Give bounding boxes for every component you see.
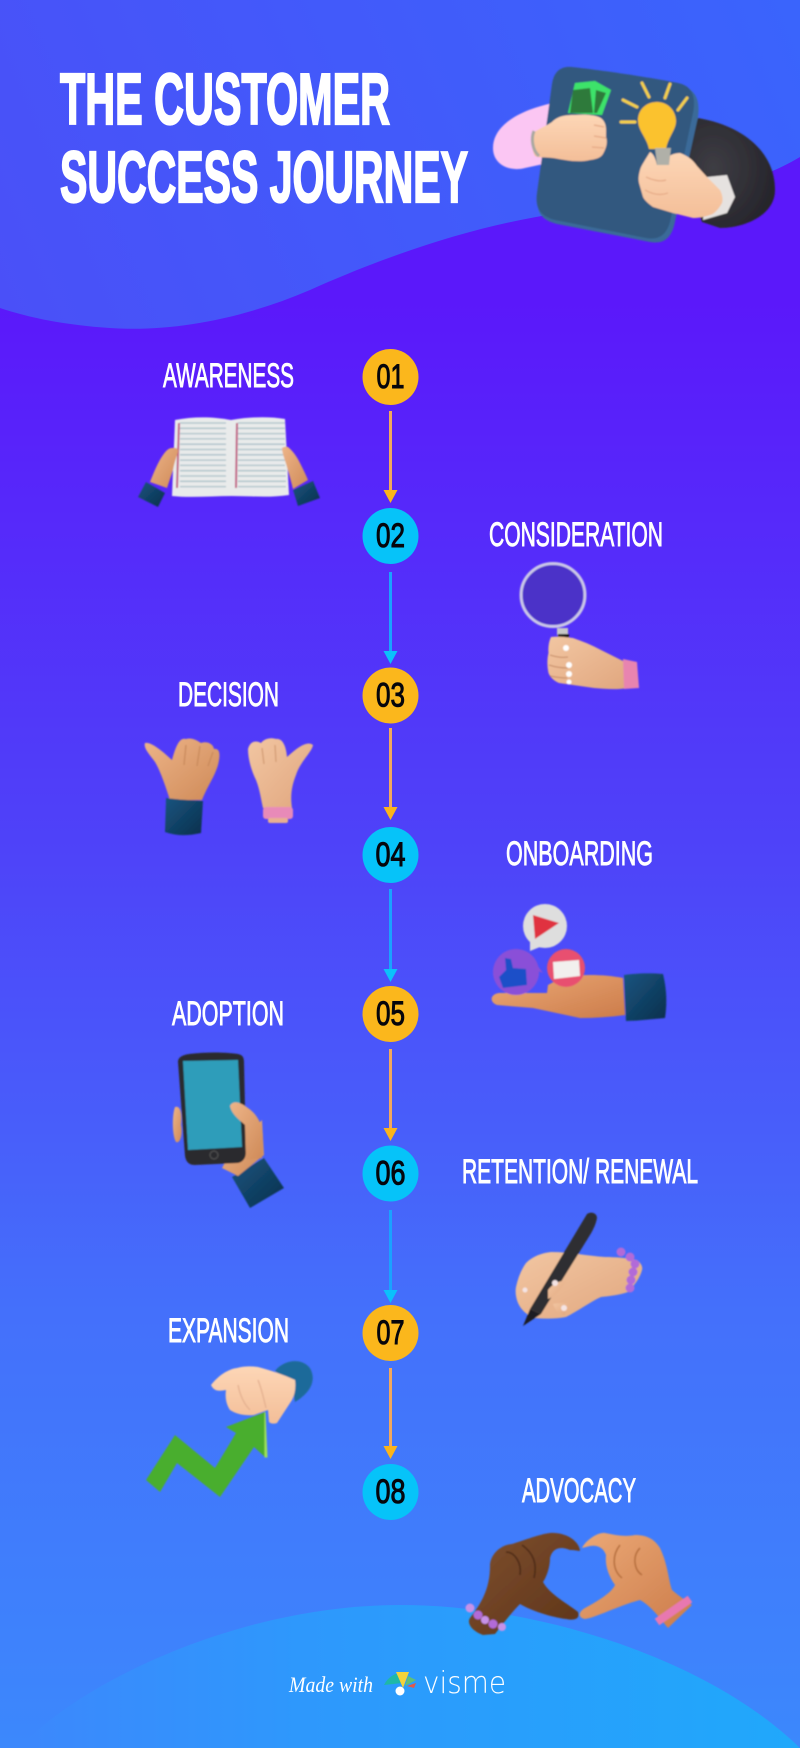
icon: two thumbs up hands (145, 738, 313, 835)
label: onboarding: ONBOARDING (506, 835, 653, 873)
icon: open book with hands (138, 417, 320, 507)
label: decision: DECISION (178, 676, 279, 714)
step 02 number: 02 (376, 517, 405, 555)
footer: made with visme (288, 1666, 506, 1701)
step 03 number: 03 (376, 676, 405, 714)
label: advocacy: ADVOCACY (522, 1472, 636, 1510)
step 02 number (362, 508, 418, 564)
footer: made with visme: Made with (288, 1672, 373, 1697)
step 01 number: 01 (376, 358, 404, 396)
step 04 number (362, 827, 418, 883)
timeline arrows (384, 411, 398, 1459)
bottom blob (20, 1605, 800, 1748)
icon: visme logo (384, 1672, 416, 1696)
step 08 number: 08 (376, 1473, 406, 1511)
title (60, 60, 468, 218)
step 01 number (362, 349, 418, 405)
label: consideration: CONSIDERATION (489, 516, 663, 554)
icon: tablet with hands, money and light bulb (493, 67, 775, 242)
step 08 number (362, 1464, 418, 1520)
step 06 number (362, 1146, 418, 1202)
top wave (0, 0, 800, 329)
icon: hand holding social bubbles (492, 904, 666, 1021)
right cuff (703, 175, 735, 220)
icon: hand holding smartphone (173, 1052, 284, 1208)
title: SUCCESS JOURNEY (60, 138, 468, 218)
step 05 number: 05 (376, 995, 405, 1033)
footer: made with visme: visme (423, 1666, 506, 1701)
icon: writing hand with pen (516, 1213, 642, 1326)
right hand (639, 152, 723, 218)
label: adoption: ADOPTION (172, 995, 284, 1033)
title: THE CUSTOMER (60, 60, 390, 140)
icon: hand lifting green growth arrow (146, 1361, 313, 1497)
label: awareness: AWARENESS (163, 357, 294, 395)
left fist (532, 115, 607, 161)
icon: two hands forming a heart (466, 1533, 692, 1635)
step 04 number: 04 (376, 836, 406, 874)
money (568, 81, 611, 115)
bulb (638, 102, 676, 149)
step 03 number (362, 668, 418, 724)
step 06 number: 06 (376, 1154, 406, 1192)
step 07 number: 07 (376, 1314, 404, 1352)
step 05 number (362, 986, 418, 1042)
icon: magnifying glass in hand (521, 564, 639, 689)
step 07 number (362, 1305, 418, 1361)
label: expansion: EXPANSION (168, 1312, 289, 1350)
